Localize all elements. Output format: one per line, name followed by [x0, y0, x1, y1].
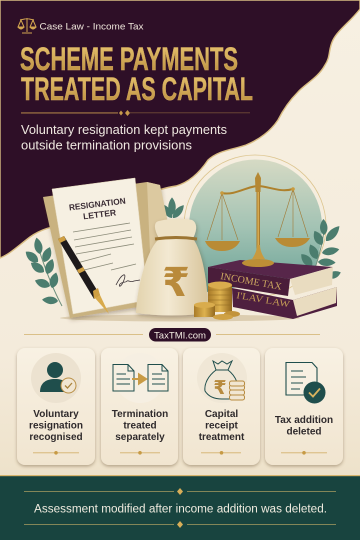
letter heading: LETTER — [83, 207, 117, 221]
table shadow — [60, 314, 300, 322]
card ornament — [281, 451, 327, 455]
header label with scales icon — [18, 18, 144, 33]
panel: voluntary resignation recognised — [17, 348, 95, 465]
title — [20, 41, 253, 107]
icon: right laurel leaves — [298, 219, 342, 280]
panel: capital receipt treatment — [183, 348, 260, 465]
card text — [112, 409, 168, 443]
folder — [43, 182, 172, 318]
icon: leaves behind money bag — [160, 197, 186, 220]
card text: recognised — [29, 432, 83, 443]
website pill with side rules — [24, 328, 320, 342]
card text: treatment — [199, 432, 245, 443]
website pill with side rules: TaxTMI.com — [154, 330, 206, 342]
title: SCHEME PAYMENTS — [20, 41, 238, 77]
title: TREATED AS CAPITAL — [21, 71, 253, 107]
icon: left laurel leaves — [23, 237, 62, 306]
card text: separately — [115, 432, 165, 443]
upper book — [208, 260, 333, 279]
signature — [116, 275, 140, 286]
card text: Capital — [205, 409, 238, 420]
icon: money bag with rupee — [136, 219, 208, 316]
icon: balance scale — [205, 172, 310, 260]
rupee symbol: ₹ — [162, 260, 190, 306]
paper — [52, 178, 148, 314]
card ornament — [120, 451, 160, 455]
subtitle: outside termination provisions — [21, 138, 192, 152]
scale base on book — [242, 259, 274, 267]
icon: document with check badge — [286, 362, 326, 404]
panel: tax addition deleted — [265, 348, 343, 465]
letter heading — [68, 196, 127, 223]
label text: Case Law - Income Tax — [40, 22, 144, 32]
card text: Tax addition — [275, 415, 333, 426]
resignation letter with folder — [43, 178, 172, 318]
subtitle: Voluntary resignation kept payments — [21, 123, 227, 137]
gold coins — [194, 282, 240, 320]
letter heading: RESIGNATION — [68, 196, 126, 212]
lower book — [232, 287, 337, 319]
teal disc behind scale — [184, 155, 326, 297]
icon: person with check badge — [31, 353, 81, 403]
card text — [29, 409, 83, 443]
lower book spine text: I'LAV LAW — [235, 291, 290, 310]
subtitle — [21, 123, 227, 152]
dark plum wave header background — [0, 0, 360, 258]
footer text: Assessment modified after income addition was deleted. — [34, 504, 327, 516]
upper book spine text: INCOME TAX — [219, 271, 283, 293]
card text: resignation — [29, 420, 83, 432]
card text — [275, 415, 333, 438]
title divider — [21, 110, 250, 116]
card text: receipt — [205, 420, 239, 432]
footer bottom ornament — [24, 521, 336, 528]
icon: fountain pen — [58, 236, 109, 314]
law books — [208, 260, 337, 319]
icon: small scales — [18, 18, 36, 33]
panel: termination treated separately — [101, 348, 178, 465]
card text — [199, 409, 245, 443]
letter lines — [73, 223, 136, 271]
card text: treated — [123, 420, 157, 432]
card text: Voluntary — [33, 409, 79, 420]
card ornament — [201, 451, 241, 455]
icon: two documents with arrow — [113, 353, 168, 403]
card ornament — [33, 451, 79, 455]
card text: Termination — [112, 409, 168, 420]
footer banner — [0, 475, 360, 540]
footer top ornament — [24, 488, 336, 495]
card text: deleted — [286, 426, 322, 438]
icon: rupee bag with coins: ₹ — [213, 377, 227, 399]
